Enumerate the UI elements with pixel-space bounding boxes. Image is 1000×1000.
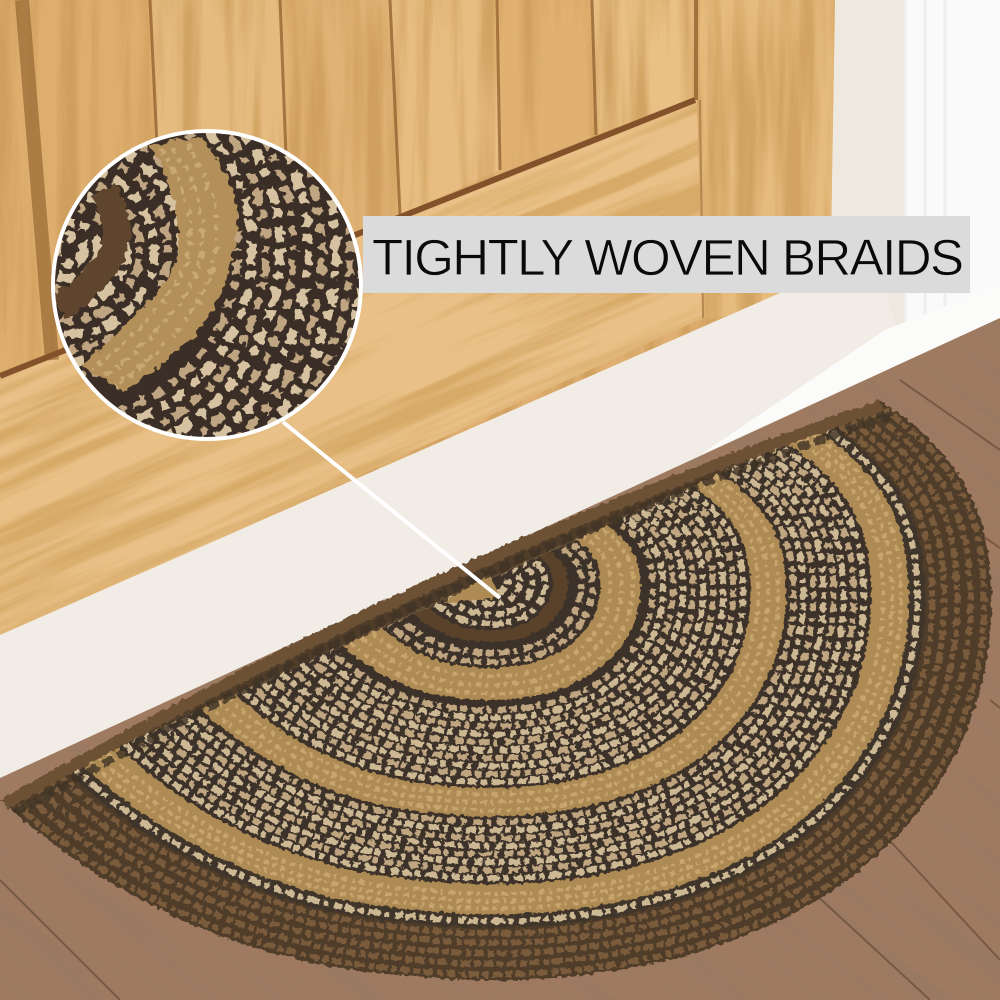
label bar	[363, 216, 970, 293]
middle gold band	[208, 476, 778, 810]
callout leader line	[283, 422, 500, 598]
wood floor	[0, 318, 1000, 1000]
inner speckled braid	[390, 543, 593, 662]
magnified gold band texture	[92, 143, 217, 386]
outer gold band	[88, 432, 901, 908]
center speckled core	[429, 558, 553, 630]
door planks	[152, 0, 835, 316]
outer speckled braid	[73, 427, 917, 921]
threshold bright edge	[700, 285, 1000, 455]
inner gold band	[350, 529, 633, 694]
label text: TIGHTLY WOVEN BRAIDS	[372, 229, 964, 286]
speckled zone C	[243, 489, 743, 782]
wooden door	[0, 0, 840, 640]
half-round braided rug	[0, 400, 991, 980]
magnified speckled braids	[55, 133, 359, 437]
straight top edge binding	[0, 400, 890, 816]
center gold wedge	[443, 574, 500, 603]
magnified braid circle	[51, 129, 363, 441]
plank grooves	[0, 0, 703, 376]
white threshold band	[0, 290, 1000, 778]
outer brown braids	[7, 403, 984, 974]
door bottom rail	[0, 100, 703, 640]
speckled zone B	[125, 446, 864, 878]
magnified gold band	[80, 136, 237, 392]
magnified brown braid	[58, 190, 117, 308]
rug base	[0, 400, 991, 980]
